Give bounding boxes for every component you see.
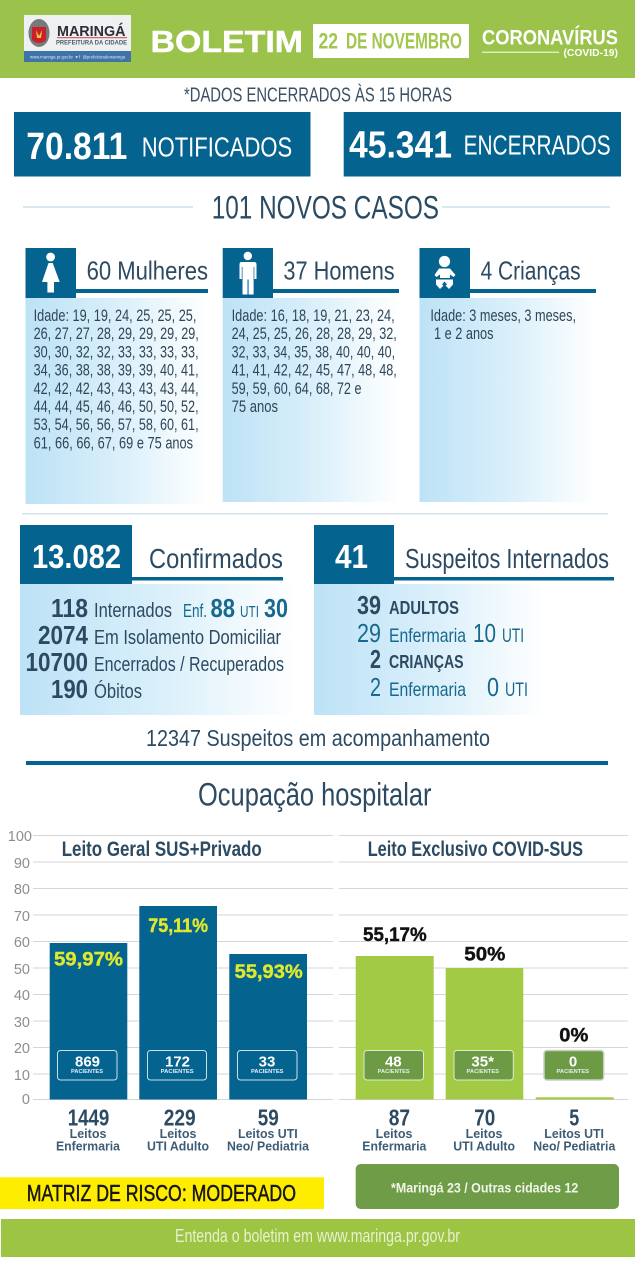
bed count: geral UTI adulto: Leitos [160, 1127, 196, 1141]
bar: geral UTI neo pediatria: 33 [259, 1054, 275, 1071]
rows: confirmados detail: Óbitos [94, 680, 142, 703]
bed count: covid UTI adulto: Leitos [466, 1127, 502, 1141]
logo: Prefeitura de Maringá: PREFEITURA DA CIDADE [56, 40, 128, 46]
bar: covid UTI adulto [446, 945, 523, 1100]
rows: suspeitos detail: 39 [357, 590, 381, 620]
y axis labels: 20 [14, 1041, 30, 1057]
y axis labels: 10 [14, 1068, 30, 1084]
icon: man [240, 252, 256, 294]
chart: hospital occupancy bars [8, 829, 628, 1154]
bar: covid UTI adulto: PACIENTES [466, 1069, 499, 1075]
coronavirus label [482, 26, 618, 59]
stat box: notificados: NOTIFICADOS [142, 131, 292, 162]
bed count: covid enfermaria: Enfermaria [362, 1140, 427, 1154]
bar: covid UTI neo pediatria: PACIENTES [556, 1069, 589, 1075]
rows: suspeitos detail: 10 [473, 618, 496, 648]
panel: crianças [420, 248, 596, 502]
ages: mulheres: 44, 44, 45, 46, 46, 50, 50, 52, [34, 398, 199, 416]
ages: homens: 32, 33, 34, 35, 38, 40, 40, 40, [232, 343, 395, 361]
bed count: geral UTI neo pediatria: 59 [258, 1105, 279, 1131]
coronavirus label: CORONAVÍRUS [482, 26, 618, 50]
rows: suspeitos detail: 29 [357, 618, 381, 648]
rows: suspeitos detail: 2 [370, 644, 381, 674]
bar: covid enfermaria: PACIENTES [378, 1069, 410, 1075]
rows: suspeitos detail: 2 [370, 672, 381, 702]
heading: confirmados: Confirmados [149, 543, 283, 574]
heading: 60 mulheres: 60 Mulheres [87, 256, 208, 286]
rows: confirmados detail: 118 [51, 593, 88, 623]
rows: confirmados detail: Internados [94, 599, 172, 622]
ages: crianças: Idade: 3 meses, 3 meses, [430, 307, 576, 325]
date box [313, 24, 469, 58]
rows: suspeitos detail: Enfermaria [389, 625, 466, 647]
rows: suspeitos detail: UTI [502, 626, 524, 647]
bar: covid enfermaria [356, 925, 434, 1100]
rows: confirmados detail [26, 593, 288, 704]
rows: suspeitos detail: UTI [505, 680, 528, 701]
bed count: geral enfermaria: Leitos [70, 1127, 106, 1141]
bed count: covid UTI neo pediatria: 5 [569, 1105, 579, 1131]
bed count: geral UTI neo pediatria [227, 1105, 310, 1154]
rows: confirmados detail: Encerrados / Recuperados [94, 653, 284, 676]
rows: suspeitos detail: ADULTOS [389, 598, 459, 618]
stat box: encerrados [344, 112, 621, 176]
bar: covid UTI adulto: 35* [471, 1054, 494, 1071]
y axis labels: 30 [14, 1015, 30, 1031]
bed count: geral UTI neo pediatria: Neo/ Pediatria [227, 1140, 310, 1154]
logo: Prefeitura de Maringá: MARINGÁ [57, 23, 126, 40]
ages: mulheres: Idade: 19, 19, 24, 25, 25, 25, [34, 307, 196, 325]
bed count: geral UTI adulto: UTI Adulto [147, 1140, 209, 1154]
rows: confirmados detail: Enf. [183, 601, 207, 621]
y axis labels: 100 [8, 829, 32, 845]
ages: homens [232, 307, 397, 416]
footer band: Entenda o boletim em www.maringa.pr.gov.br [175, 1226, 460, 1246]
note box: Maringá / other cities: *Maringá 23 / Outras cidades 12 [391, 1180, 578, 1196]
ages: mulheres: 26, 27, 27, 28, 29, 29, 29, 29, [34, 325, 199, 343]
bed count: geral UTI adulto: 229 [164, 1105, 196, 1131]
text: suspects in follow-up: 12347 Suspeitos em acompanhamento [146, 725, 490, 751]
bar: covid enfermaria: 55,17% [363, 925, 427, 946]
bar: covid UTI neo pediatria [536, 1026, 614, 1100]
rows: suspeitos detail: 0 [487, 672, 499, 702]
y axis labels: 60 [14, 935, 30, 951]
bed count: covid enfermaria: 87 [389, 1105, 410, 1131]
stat box: encerrados: 45.341 [349, 124, 452, 166]
ages: mulheres: 30, 30, 32, 32, 33, 33, 33, 33, [34, 343, 199, 361]
ages: homens: 24, 25, 25, 26, 28, 28, 29, 32, [232, 325, 397, 343]
bar: geral enfermaria: 869 [75, 1054, 100, 1071]
bar: covid enfermaria: 48 [385, 1054, 402, 1071]
ages: mulheres: 61, 66, 66, 67, 69 e 75 anos [34, 434, 193, 452]
stat box: notificados: 70.811 [26, 126, 127, 168]
coronavirus label: (COVID-19) [564, 47, 618, 59]
ages: mulheres: 53, 54, 56, 56, 57, 58, 60, 61, [34, 416, 199, 434]
note box: Maringá / other cities [356, 1164, 619, 1209]
rows: confirmados detail: 88 [210, 593, 235, 623]
ages: homens: Idade: 16, 18, 19, 21, 23, 24, [232, 307, 395, 325]
header band [0, 0, 635, 78]
rows: suspeitos detail [357, 590, 528, 702]
rows: confirmados detail: Em Isolamento Domiciliar [94, 626, 281, 649]
title: Boletim: BOLETIM [150, 24, 303, 59]
logo: Prefeitura de Maringá [24, 15, 131, 62]
ages: homens: 75 anos [232, 398, 278, 416]
bar: geral enfermaria: 59,97% [54, 950, 123, 971]
date box: DE NOVEMBRO [346, 28, 462, 54]
bed count: covid enfermaria: Leitos [376, 1127, 412, 1141]
rows: suspeitos detail: Enfermaria [389, 679, 466, 701]
chart title: leito geral: Leito Geral SUS+Privado [62, 838, 262, 861]
bed count: covid UTI neo pediatria: Leitos UTI [544, 1127, 604, 1141]
panel: homens [223, 248, 399, 502]
bar: covid UTI adulto: 50% [464, 945, 505, 966]
bar: geral enfermaria [50, 943, 127, 1100]
number: suspeitos: 41 [335, 538, 368, 575]
bar: geral enfermaria: PACIENTES [71, 1069, 103, 1075]
date box: 22 [318, 28, 338, 54]
risk matrix banner: MATRIZ DE RISCO: MODERADO [27, 1180, 296, 1206]
icon: baby [434, 256, 456, 289]
bed count: covid UTI neo pediatria: Neo/ Pediatria [533, 1140, 616, 1154]
ages: mulheres [34, 307, 199, 452]
rows: suspeitos detail: CRIANÇAS [389, 652, 464, 672]
ages: homens: 59, 59, 60, 64, 68, 72 e [232, 380, 362, 398]
ages: crianças: 1 e 2 anos [434, 325, 494, 343]
y axis labels: 40 [14, 988, 30, 1004]
bar: geral UTI adulto: 172 [165, 1054, 190, 1071]
bed count: geral UTI adulto [147, 1105, 209, 1154]
rows: confirmados detail: 190 [51, 674, 88, 704]
bed count: covid UTI adulto: 70 [474, 1105, 495, 1131]
heading: new cases: 101 NOVOS CASOS [212, 190, 439, 226]
ages: homens: 41, 41, 42, 42, 45, 47, 48, 48, [232, 362, 397, 380]
bed count: covid enfermaria [362, 1105, 427, 1154]
heading: 4 crianças: 4 Crianças [481, 256, 581, 286]
bed count: geral enfermaria [56, 1105, 121, 1154]
logo: Prefeitura de Maringá: www.maringa.pr.gov.br ♥ f @prefeiturademaringa [30, 54, 126, 60]
y axis labels: 70 [14, 909, 30, 925]
bed count: covid UTI adulto: UTI Adulto [453, 1140, 515, 1154]
risk matrix banner [0, 1177, 324, 1209]
panel: mulheres [26, 248, 208, 504]
ages: mulheres: 34, 36, 38, 38, 39, 39, 40, 41, [34, 362, 199, 380]
bar: covid UTI neo pediatria: 0% [559, 1026, 588, 1047]
rows: confirmados detail: 2074 [38, 620, 88, 650]
bed count: covid UTI neo pediatria [533, 1105, 616, 1154]
heading: 37 homens: 37 Homens [283, 256, 395, 286]
bed count: geral enfermaria: 1449 [68, 1105, 109, 1131]
panel: suspeitos internados [314, 525, 614, 715]
ages: mulheres: 42, 42, 42, 43, 43, 43, 43, 44, [34, 380, 199, 398]
rows: confirmados detail: UTI [240, 604, 259, 621]
rows: confirmados detail: 30 [264, 593, 288, 623]
panel: confirmados [20, 525, 295, 715]
note: data closing time: *DADOS ENCERRADOS ÀS 15 HORAS [184, 84, 452, 106]
y axis labels: 90 [14, 856, 30, 872]
rows: confirmados detail: 10700 [26, 647, 88, 677]
bed count: covid UTI adulto [453, 1105, 515, 1154]
ages: crianças [430, 307, 576, 343]
icon: woman [42, 253, 60, 292]
stat box: notificados [14, 112, 310, 176]
bar: geral UTI adulto: 75,11% [148, 916, 208, 937]
bed count: geral UTI neo pediatria: Leitos UTI [238, 1127, 298, 1141]
bar: geral UTI adulto: PACIENTES [161, 1069, 194, 1075]
bar: geral UTI neo pediatria: 55,93% [235, 962, 303, 983]
bar: geral UTI neo pediatria [229, 954, 307, 1100]
number: confirmados: 13.082 [32, 538, 121, 575]
y axis labels: 0 [22, 1092, 30, 1108]
y axis labels: 50 [14, 962, 30, 978]
y axis labels [8, 829, 32, 1108]
heading: hospital occupancy: Ocupação hospitalar [198, 776, 432, 812]
bar: geral UTI neo pediatria: PACIENTES [251, 1069, 284, 1075]
footer band [1, 1219, 635, 1257]
bar: geral UTI adulto [139, 906, 217, 1100]
bar: covid UTI neo pediatria: 0 [569, 1054, 577, 1071]
y axis labels: 80 [14, 882, 30, 898]
bed count: geral enfermaria: Enfermaria [56, 1140, 121, 1154]
